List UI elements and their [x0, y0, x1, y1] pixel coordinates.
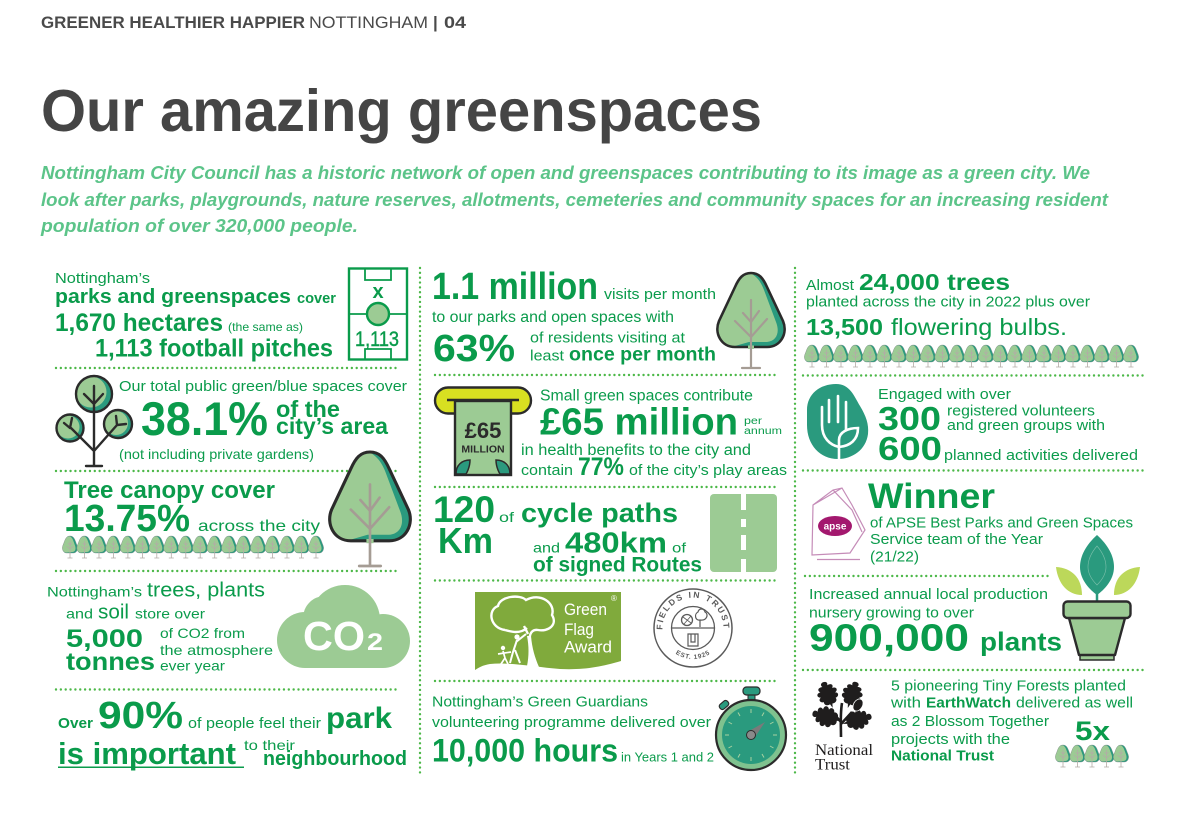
panel: Tiny Forests [810, 678, 1133, 774]
panel: health benefits: in health benefits to the city and [521, 442, 751, 459]
icon: CO2 cloud: 2 [367, 629, 383, 656]
panel: public green and blue spaces: of the [276, 396, 340, 422]
panel: health benefits: 77% [578, 453, 624, 481]
intro paragraph: population of over 320,000 people. [40, 215, 358, 236]
panel: APSE winner: of APSE Best Parks and Green Spaces [870, 515, 1133, 531]
panel: plant nursery: 900,000 [809, 618, 969, 660]
panel: carbon storage: store over [135, 606, 205, 622]
panel: carbon storage: ever year [160, 658, 225, 674]
intro paragraph [40, 162, 1109, 236]
panel: plant nursery: plants [980, 627, 1062, 657]
logo: Green Flag Award: Award [564, 638, 612, 657]
panel: park importance: Over [58, 715, 93, 732]
panel: volunteers [807, 384, 1138, 467]
icon: hand with leaf [807, 384, 868, 459]
panel: park importance: is important [58, 736, 236, 771]
panel: visits: once per month [569, 345, 716, 366]
panel: Tiny Forests: 5x [1075, 716, 1110, 746]
icon: row of 23 trees [804, 345, 1139, 367]
panel: plant nursery: nursery growing to over [809, 604, 974, 621]
logo: National Trust: Trust [815, 756, 851, 774]
panel: health benefits: £65 million [540, 401, 738, 443]
panel: Green Guardians [432, 687, 786, 770]
panel: cycle paths: cycle paths [521, 498, 678, 528]
icon: banknote from slot: MILLION [461, 444, 505, 456]
panel: Tiny Forests: EarthWatch [926, 695, 1011, 712]
panel: volunteers: 600 [878, 430, 942, 467]
panel: parks and greenspaces: 1,113 football pitches [95, 334, 333, 362]
panel: trees and bulbs [804, 269, 1139, 367]
panel: Green Guardians: Nottingham’s Green Guardians [432, 694, 648, 711]
icon: potted plant [1056, 535, 1140, 660]
panel: Tiny Forests: delivered as well [1016, 695, 1133, 712]
panel: public green and blue spaces: (not including private gardens) [119, 446, 314, 462]
panel: public green and blue spaces [56, 376, 407, 466]
panel: cycle paths: 480km [565, 528, 667, 560]
panel: plant nursery [809, 535, 1140, 660]
icon: football pitch: 1,113 [355, 328, 399, 351]
panel: APSE winner: (21/22) [870, 550, 919, 566]
panel: health benefits: per [744, 416, 763, 427]
logo: Green Flag Award: ® [611, 594, 617, 603]
panel: trees and bulbs: Almost [806, 277, 855, 294]
logo: Fields in Trust [653, 588, 733, 668]
intro paragraph: Nottingham City Council has a historic network of open and greenspaces contributing to its image as a green city. We [41, 162, 1090, 183]
panel: park importance [58, 695, 407, 771]
panel: tree canopy cover [62, 452, 410, 566]
panel: parks and greenspaces: (the same as) [228, 320, 303, 334]
header strip: 04 [444, 13, 467, 32]
icon: CO2 cloud: CO [303, 613, 365, 659]
panel: public green and blue spaces: Our total public green/blue spaces cover [119, 378, 407, 395]
header strip: GREENER HEALTHIER HAPPIER [41, 13, 305, 32]
icon: road [710, 494, 777, 572]
panel: parks and greenspaces: parks and greenspaces [55, 286, 291, 308]
panel: parks and greenspaces: 1,670 hectares [55, 309, 223, 337]
panel: Green Guardians: 10,000 hours [432, 733, 618, 769]
panel: parks and greenspaces: cover [297, 290, 336, 307]
panel: Tiny Forests: with [890, 695, 921, 712]
panel: APSE winner: Winner [868, 477, 995, 516]
icon: banknote from slot [435, 388, 531, 475]
panel: trees and bulbs: 24,000 trees [859, 269, 1010, 295]
panel: parks and greenspaces: Nottingham’s [55, 270, 150, 287]
header strip [41, 13, 467, 32]
panel: volunteers: 300 [878, 400, 941, 437]
panel: park importance: to their [244, 737, 295, 753]
panel: Tiny Forests: projects with the [891, 731, 1010, 748]
panel: health benefits [435, 388, 787, 481]
panel: cycle paths: of signed Routes [533, 554, 702, 577]
panel: tree canopy cover: across the city [198, 518, 320, 535]
panel: visits: to our parks and open spaces with [432, 309, 674, 326]
logo: Green Flag Award: Flag [564, 620, 594, 639]
panel: cycle paths: of [672, 540, 686, 556]
panel: park importance: 90% [98, 695, 183, 737]
icon: stopwatch [716, 687, 786, 770]
panel: volunteers: planned activities delivered [944, 448, 1138, 464]
logo: Green Flag Award [475, 592, 621, 670]
panel: park importance: park [326, 702, 392, 735]
icon: football pitch [349, 268, 407, 360]
panel: carbon storage: tonnes [66, 648, 155, 676]
panel: award logos [475, 588, 733, 670]
panel: public green and blue spaces: city’s area [276, 413, 388, 439]
panel: Tiny Forests: National Trust [891, 748, 994, 765]
panel: APSE winner: Service team of the Year [870, 532, 1043, 548]
panel: health benefits: Small green spaces contribute [540, 388, 753, 405]
icon: football pitch: x [372, 281, 384, 303]
panel: public green and blue spaces: 38.1% [141, 392, 268, 445]
panel: carbon storage: soil [98, 602, 129, 624]
panel: carbon storage: 5,000 [66, 625, 143, 653]
panel: visits: 1.1 million [432, 266, 598, 308]
panel: trees and bulbs: flowering bulbs. [891, 314, 1067, 340]
panel: health benefits: contain [521, 462, 573, 479]
panel: volunteers: registered volunteers [947, 403, 1095, 419]
icon: row of 18 trees [62, 536, 324, 558]
panel: carbon storage [47, 580, 410, 676]
panel: Tiny Forests: as 2 Blossom Together [891, 713, 1049, 730]
title: Our amazing greenspaces [41, 78, 762, 144]
panel: trees and bulbs: planted across the city in 2022 plus over [806, 295, 1090, 311]
panel: park importance: neighbourhood [263, 748, 407, 770]
panel: parks and greenspaces [55, 268, 407, 362]
panel: Green Guardians: volunteering programme delivered over [432, 714, 711, 731]
panel: Green Guardians: in Years 1 and 2 [621, 750, 714, 765]
panel: tree canopy cover: Tree canopy cover [64, 477, 275, 504]
panel: cycle paths: Km [438, 520, 493, 561]
panel: carbon storage: trees, plants [147, 580, 265, 602]
panel: health benefits: of the city’s play areas [629, 462, 787, 479]
icon: large tree [330, 452, 410, 566]
header strip: | [433, 13, 438, 32]
panel: carbon storage: of CO2 from [160, 625, 245, 641]
panel: visits [432, 266, 785, 370]
panel: park importance: of people feel their [188, 715, 321, 732]
logo: National Trust [810, 679, 874, 774]
panel: carbon storage: Nottingham’s [47, 584, 142, 600]
panel: tree canopy cover: 13.75% [64, 498, 190, 540]
icon: APSE trophy [812, 488, 865, 560]
panel: plant nursery: Increased annual local production [809, 586, 1048, 603]
panel: carbon storage: the atmosphere [160, 642, 273, 658]
panel: carbon storage: and [66, 606, 93, 622]
panel: cycle paths: and [533, 540, 560, 556]
panel: trees and bulbs: 13,500 [806, 314, 883, 340]
panel: cycle paths: 120 [433, 489, 495, 530]
icon: three-crown tree [56, 376, 132, 466]
intro paragraph: look after parks, playgrounds, nature reserves, allotments, cemeteries and community spaces for an increasing resident [41, 189, 1109, 210]
icon: banknote from slot: £65 [465, 418, 501, 443]
logo: Green Flag Award: Green [564, 600, 607, 619]
panel: visits: visits per month [604, 286, 716, 303]
panel: visits: 63% [433, 328, 515, 370]
panel: cycle paths: of [499, 509, 514, 525]
icon: CO2 cloud [277, 585, 410, 668]
panel: APSE winner [812, 477, 1133, 566]
panel: Tiny Forests: 5 pioneering Tiny Forests planted [891, 678, 1126, 695]
icon: row of 5 trees [1055, 745, 1129, 767]
icon: APSE trophy: apse [824, 522, 847, 532]
panel: volunteers: Engaged with over [878, 386, 1011, 403]
logo: Fields in Trust: FIELDS IN TRUST [656, 592, 730, 630]
panel: cycle paths [433, 489, 777, 577]
panel: visits: least [530, 348, 565, 365]
header strip: NOTTINGHAM [309, 13, 428, 32]
icon: tree [717, 273, 785, 368]
logo: National Trust: National [815, 742, 874, 759]
panel: health benefits: annum [744, 426, 782, 437]
panel: volunteers: and green groups with [947, 418, 1105, 434]
logo: Fields in Trust: EST. 1925 [676, 650, 710, 660]
panel: visits: of residents visiting at [530, 330, 686, 347]
